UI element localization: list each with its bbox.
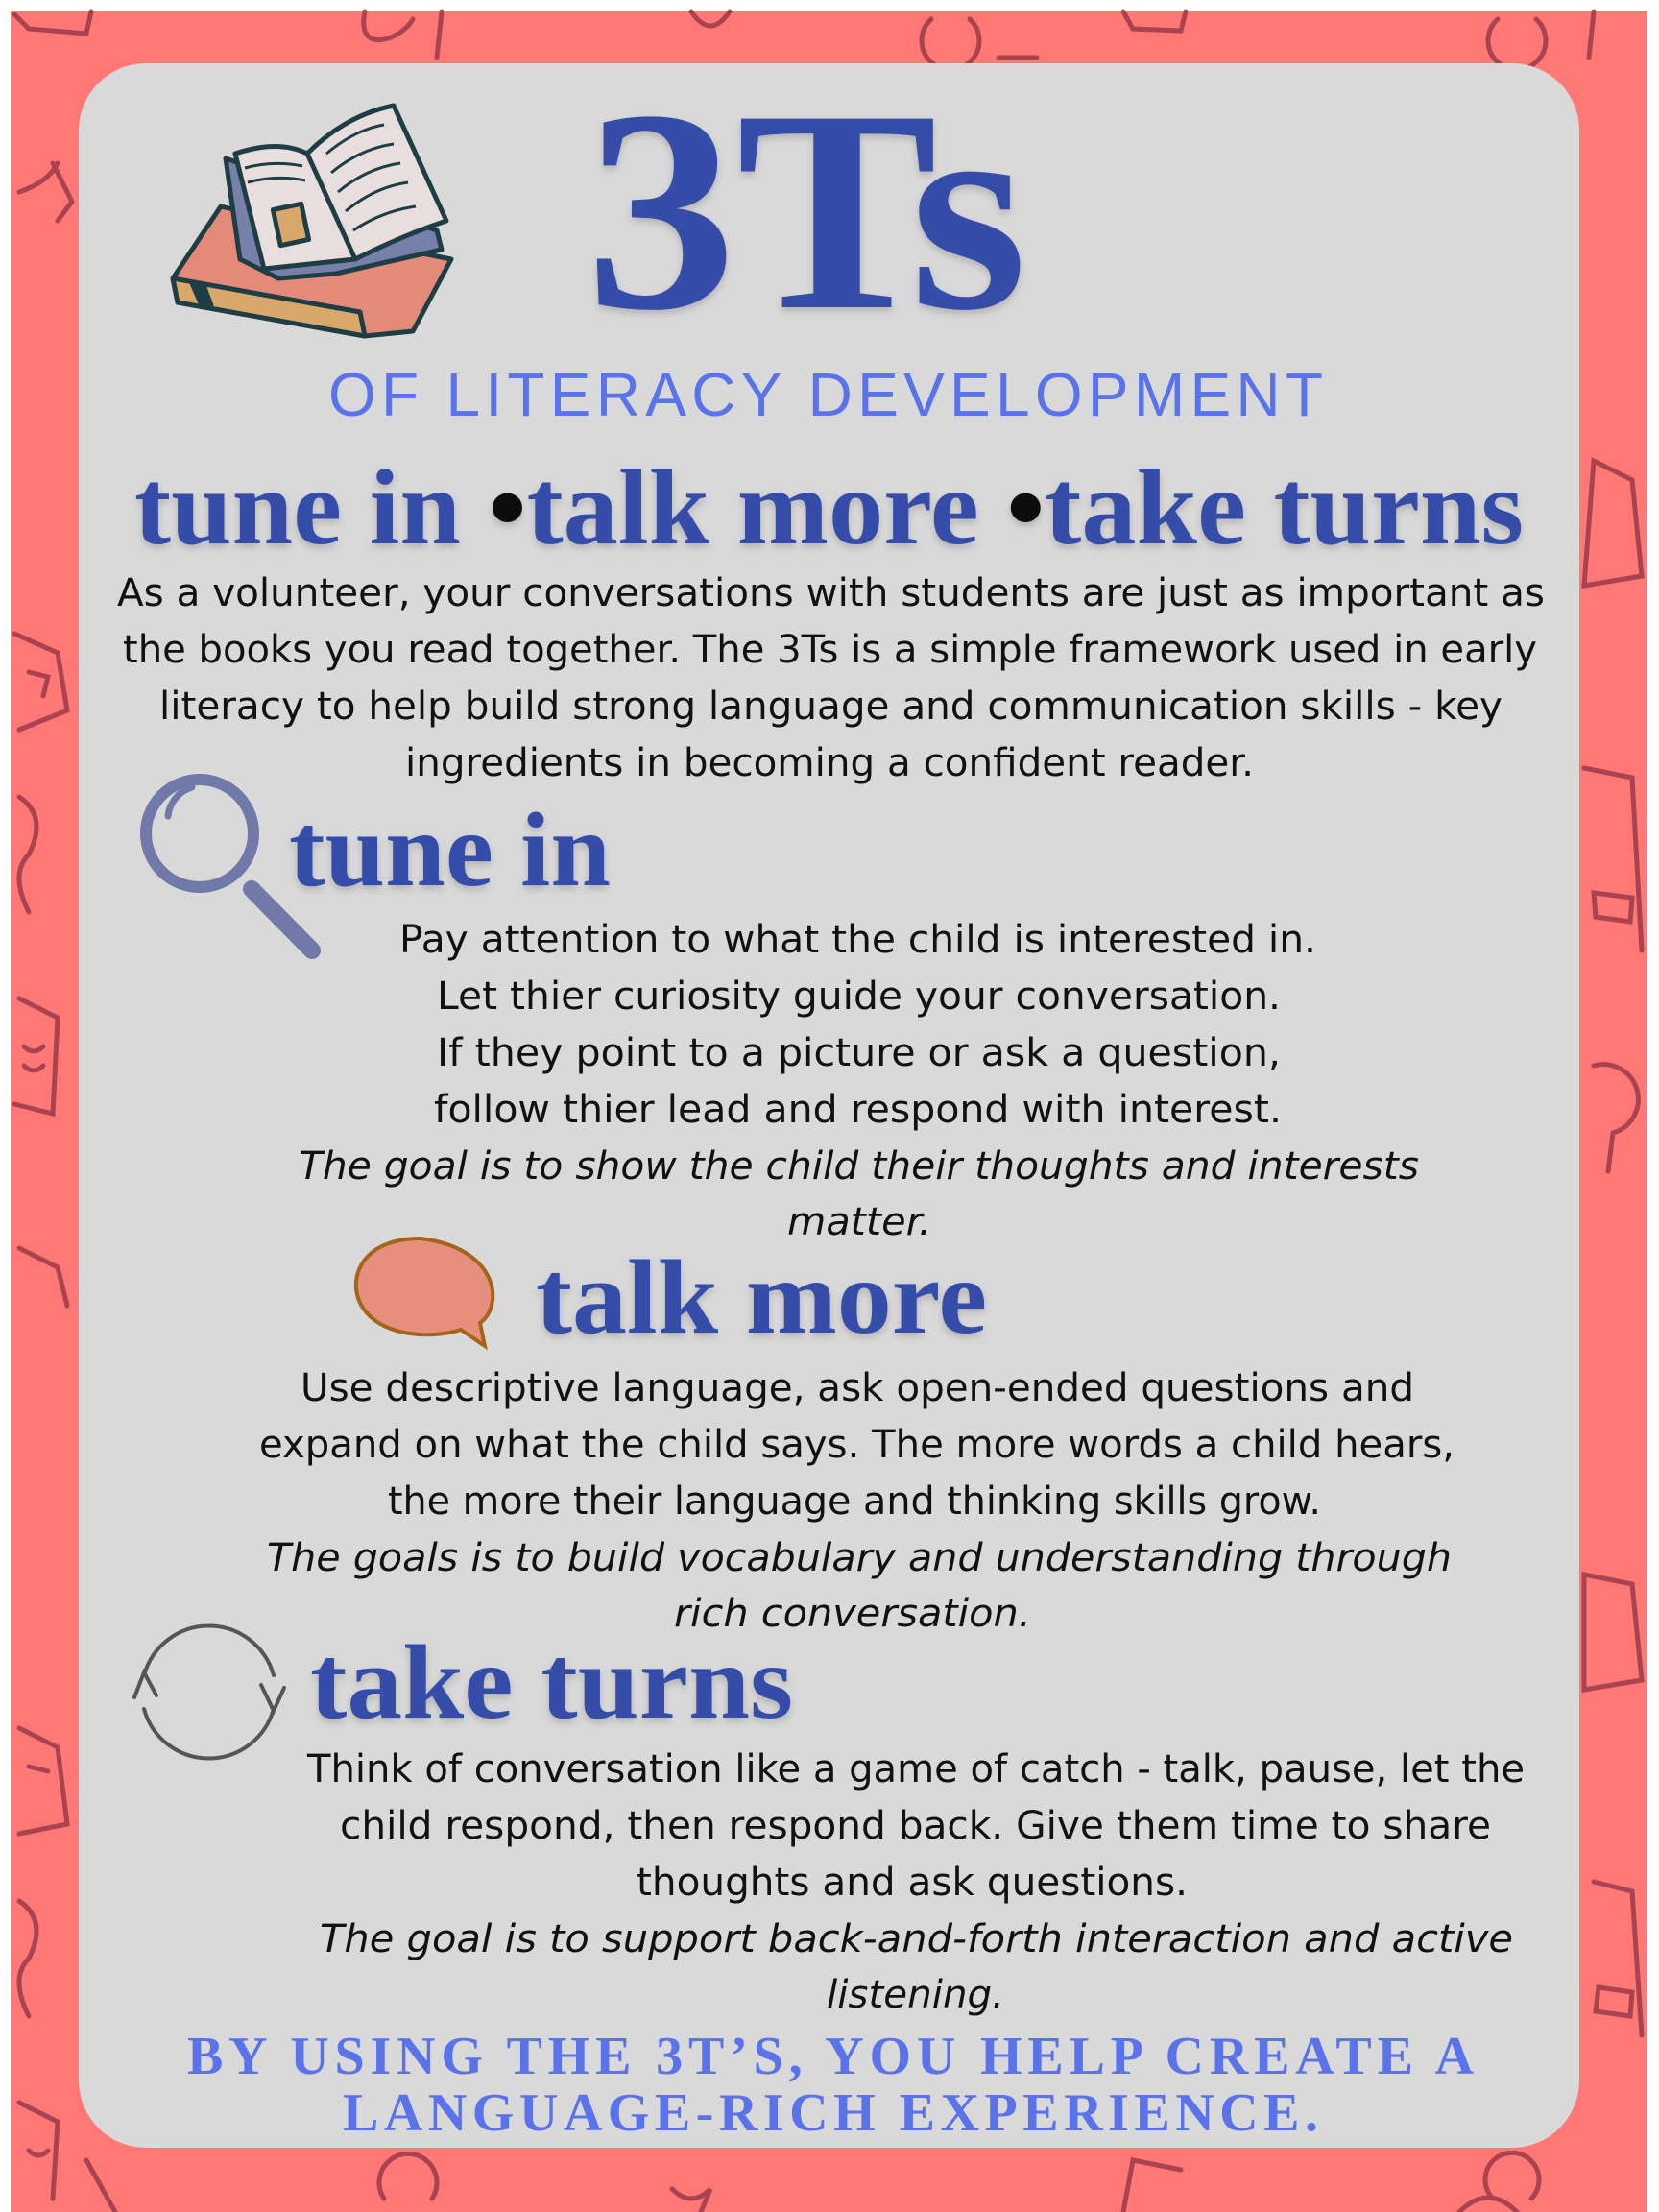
- text: tune in: matter.: [787, 1200, 931, 1244]
- icon: books: [173, 106, 451, 336]
- heading: talk more: talk more: [536, 1238, 987, 1356]
- text: take turns: Think of conversation like a game of catch - talk, pause, let the: [306, 1747, 1525, 1791]
- text: talk more: [259, 1366, 1455, 1636]
- text: take turns: [306, 1747, 1525, 2017]
- icon: cycle arrows: [134, 1626, 284, 1758]
- tagline: tune in •talk more •take turns: [134, 448, 1524, 567]
- text: talk more: rich conversation.: [674, 1592, 1031, 1636]
- text: tune in: Let thier curiosity guide your conversation.: [437, 974, 1281, 1019]
- text: tune in: Pay attention to what the child is interested in.: [399, 918, 1316, 962]
- text: take turns: listening.: [827, 1973, 1004, 2017]
- closing statement: BY USING THE 3T’S, YOU HELP CREATE A: [187, 2027, 1475, 2086]
- closing statement: [187, 2027, 1475, 2143]
- icon: magnifier: [146, 780, 312, 950]
- text: take turns: The goal is to support back-and-forth interaction and active: [320, 1917, 1513, 1961]
- text: talk more: the more their language and thinking skills grow.: [388, 1479, 1321, 1524]
- icon: speech bubble: [356, 1238, 493, 1346]
- text: take turns: thoughts and ask questions.: [637, 1861, 1188, 1905]
- text: tune in: The goal is to show the child their thoughts and interests: [299, 1144, 1419, 1189]
- closing statement: LANGUAGE-RICH EXPERIENCE.: [343, 2083, 1318, 2143]
- intro paragraph: As a volunteer, your conversations with students are just as important as: [117, 571, 1545, 615]
- text: take turns: child respond, then respond back. Give them time to share: [340, 1804, 1491, 1848]
- heading: take turns: take turns: [310, 1623, 793, 1741]
- intro paragraph: literacy to help build strong language and communication skills - key: [159, 685, 1503, 729]
- text: talk more: expand on what the child says. The more words a child hears,: [259, 1423, 1455, 1467]
- intro paragraph: ingredients in becoming a confident reader.: [405, 741, 1254, 785]
- title: 3Ts: 3Ts: [586, 51, 1027, 370]
- text: tune in: [299, 918, 1419, 1244]
- text: tune in: If they point to a picture or ask a question,: [437, 1031, 1281, 1075]
- intro paragraph: [117, 571, 1545, 785]
- text: tune in: follow thier lead and respond with interest.: [434, 1088, 1282, 1132]
- heading: tune in: tune in: [289, 791, 611, 908]
- text: talk more: Use descriptive language, ask open-ended questions and: [301, 1366, 1414, 1410]
- intro paragraph: the books you read together. The 3Ts is a simple framework used in early: [123, 628, 1537, 672]
- subtitle: OF LITERACY DEVELOPMENT: [328, 360, 1323, 429]
- text: talk more: The goals is to build vocabulary and understanding through: [267, 1536, 1452, 1580]
